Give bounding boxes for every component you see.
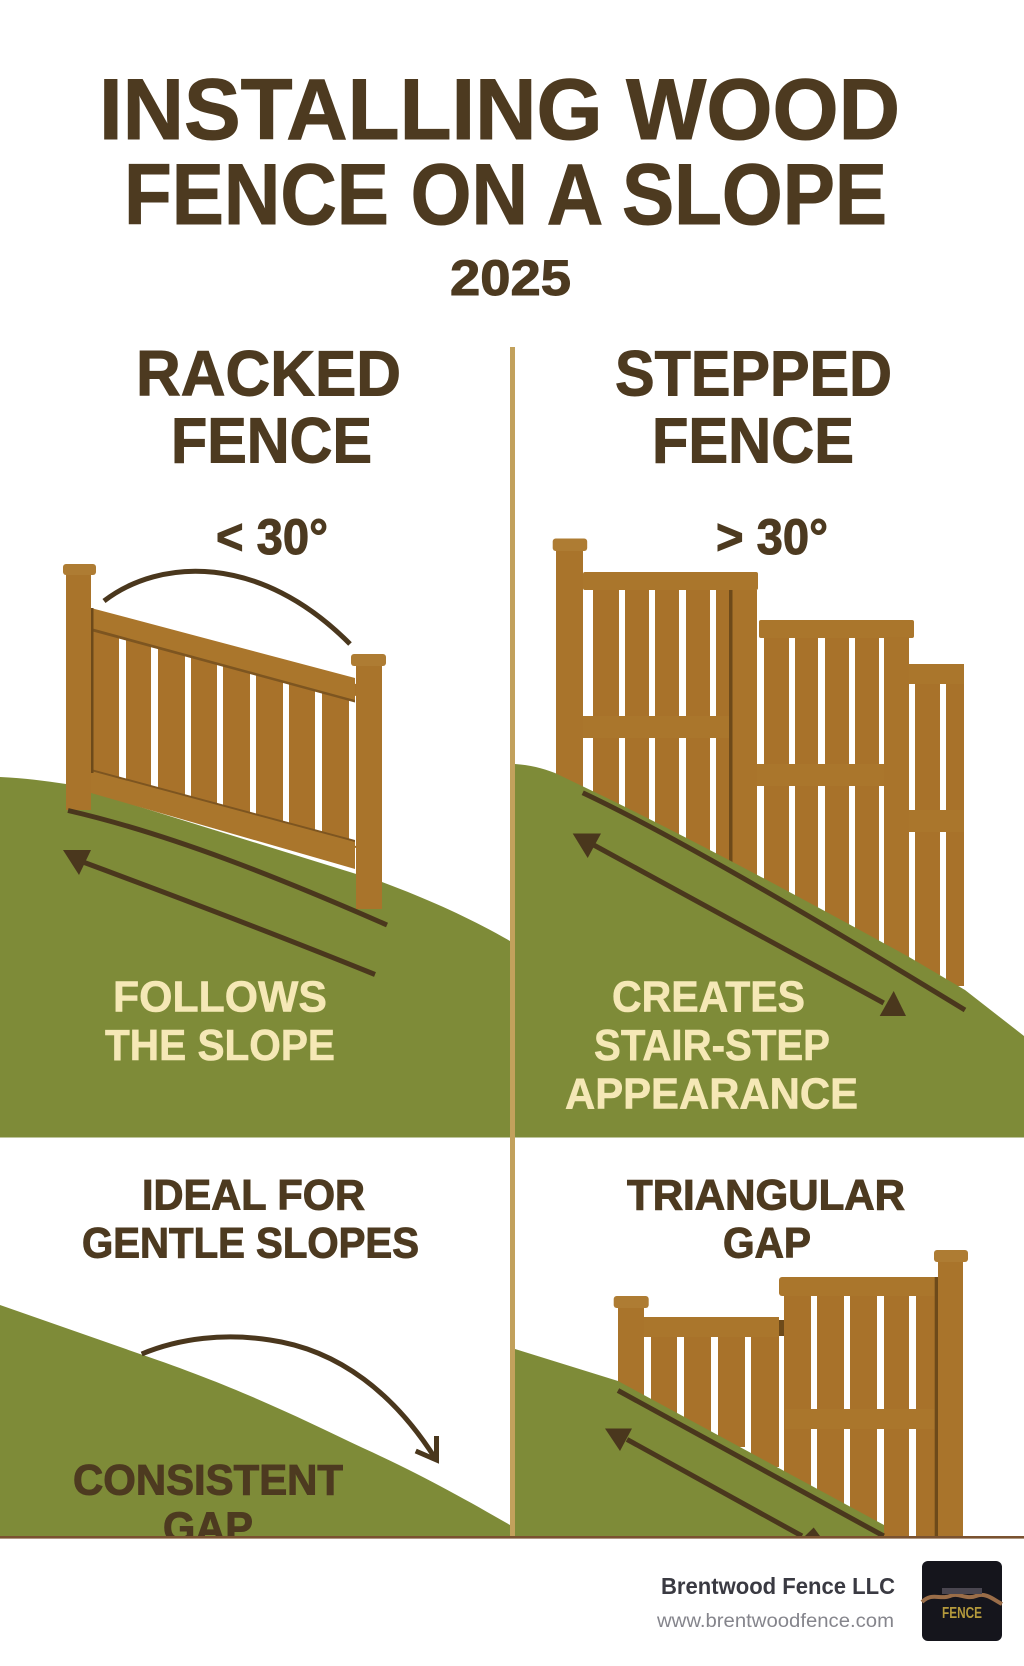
center divider — [510, 347, 515, 1537]
heading: racked fence: FENCE — [171, 404, 372, 476]
footer — [0, 1536, 1024, 1666]
slope arrow — [63, 850, 375, 974]
stepped fence illustration — [553, 538, 964, 986]
panel: racked fence — [0, 338, 510, 1138]
company name: Brentwood Fence LLC — [661, 1573, 895, 1599]
racked fence illustration — [63, 564, 386, 909]
slope line — [618, 1390, 884, 1536]
panel: stepped fence — [515, 338, 1024, 1138]
heading: racked fence — [136, 338, 401, 476]
caption: consistent gap: GAP — [163, 1504, 253, 1552]
caption: consistent gap — [73, 1456, 343, 1552]
year subtitle: 2025 — [450, 250, 571, 306]
caption: creates stair-step appearance — [565, 972, 858, 1118]
logo: FENCE — [942, 1605, 982, 1622]
caption: follows the slope: FOLLOWS — [113, 972, 327, 1022]
hillside — [515, 764, 1024, 1138]
angle label: under 30 degrees: < 30° — [216, 509, 328, 565]
caption: creates stair-step appearance: CREATES — [612, 972, 805, 1022]
title — [99, 62, 900, 243]
angle arc — [104, 571, 350, 644]
heading: ideal for gentle slopes: IDEAL FOR — [142, 1172, 365, 1220]
logo — [922, 1561, 1002, 1641]
caption: creates stair-step appearance: APPEARANCE — [565, 1070, 858, 1118]
triangular gap fence illustration — [614, 1250, 968, 1536]
heading: stepped fence: STEPPED — [615, 338, 892, 410]
heading: racked fence: RACKED — [136, 338, 401, 410]
hillside — [0, 1305, 510, 1537]
panel: triangular gap — [515, 1172, 968, 1536]
curved arrow — [142, 1337, 436, 1460]
slope arrow — [605, 1428, 820, 1536]
caption: follows the slope — [105, 972, 335, 1070]
double-headed slope arrow — [573, 834, 906, 1016]
website: www.brentwoodfence.com — [656, 1611, 894, 1632]
heading: triangular gap: TRIANGULAR — [627, 1172, 905, 1220]
angle label: over 30 degrees: > 30° — [716, 509, 828, 565]
caption: creates stair-step appearance: STAIR-STEP — [594, 1021, 830, 1070]
heading: triangular gap: GAP — [723, 1220, 811, 1268]
heading: stepped fence — [615, 338, 892, 476]
title: FENCE ON A SLOPE — [124, 147, 887, 243]
hillside — [0, 777, 510, 1138]
panel: gentle slopes — [0, 1172, 510, 1552]
slope line — [583, 793, 965, 1010]
caption: consistent gap: CONSISTENT — [73, 1456, 343, 1504]
fence gaps — [119, 632, 356, 846]
heading: triangular gap — [627, 1172, 905, 1268]
title: INSTALLING WOOD — [99, 62, 900, 158]
slope line — [68, 810, 387, 925]
heading: ideal for gentle slopes: GENTLE SLOPES — [82, 1220, 419, 1268]
caption: follows the slope: THE SLOPE — [105, 1021, 335, 1070]
hillside — [515, 1349, 884, 1536]
heading: stepped fence: FENCE — [652, 404, 854, 476]
heading: ideal for gentle slopes — [82, 1172, 419, 1268]
